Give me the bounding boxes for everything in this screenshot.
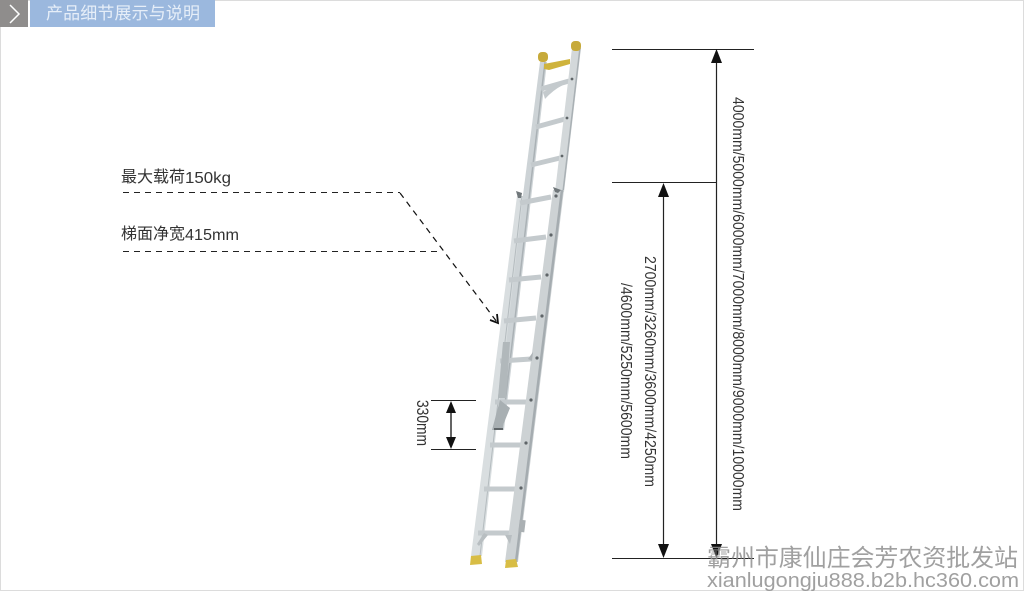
base section left rail	[471, 196, 523, 556]
ladder rungs	[478, 81, 569, 533]
dimension: extended height: 4000mm/5000mm/6000mm/7000mm/8000mm/9000mm/10000mm	[729, 97, 746, 511]
icon: chevron tab	[0, 0, 28, 27]
watermark: 霸州市康仙庄会芳农资批发站	[707, 545, 1018, 572]
yellow rubber feet	[470, 555, 518, 568]
dimension: closed height	[612, 182, 716, 558]
section heading: 产品细节展示与说明	[46, 4, 200, 23]
callout: rung width	[121, 225, 441, 252]
braces, guide and rivet details	[477, 78, 573, 546]
callout: rung width: 梯面净宽	[121, 225, 185, 243]
callout: maximum load: 最大载荷	[121, 168, 185, 186]
callout: maximum load: 150kg	[185, 170, 231, 187]
arrow: dashed leader to rung	[400, 193, 498, 323]
fly section right rail	[555, 48, 581, 192]
dimension: rung spacing 330mm	[413, 400, 476, 450]
callout: maximum load	[121, 168, 400, 192]
fly section left rail	[493, 62, 547, 430]
yellow top hook	[538, 41, 581, 70]
dimension: closed height: /4600mm/5250mm/5600mm	[617, 283, 634, 459]
header bar	[0, 0, 215, 27]
section heading	[30, 0, 215, 27]
ladder illustration	[470, 41, 581, 568]
dimension: extended height	[612, 49, 754, 558]
dimension: rung spacing 330mm: 330mm	[413, 400, 432, 446]
base section right rail	[505, 190, 564, 562]
dimension: closed height: 2700mm/3260mm/3600mm/4250mm	[641, 256, 658, 487]
callout: rung width: 415mm	[185, 227, 239, 244]
watermark	[707, 545, 1019, 591]
